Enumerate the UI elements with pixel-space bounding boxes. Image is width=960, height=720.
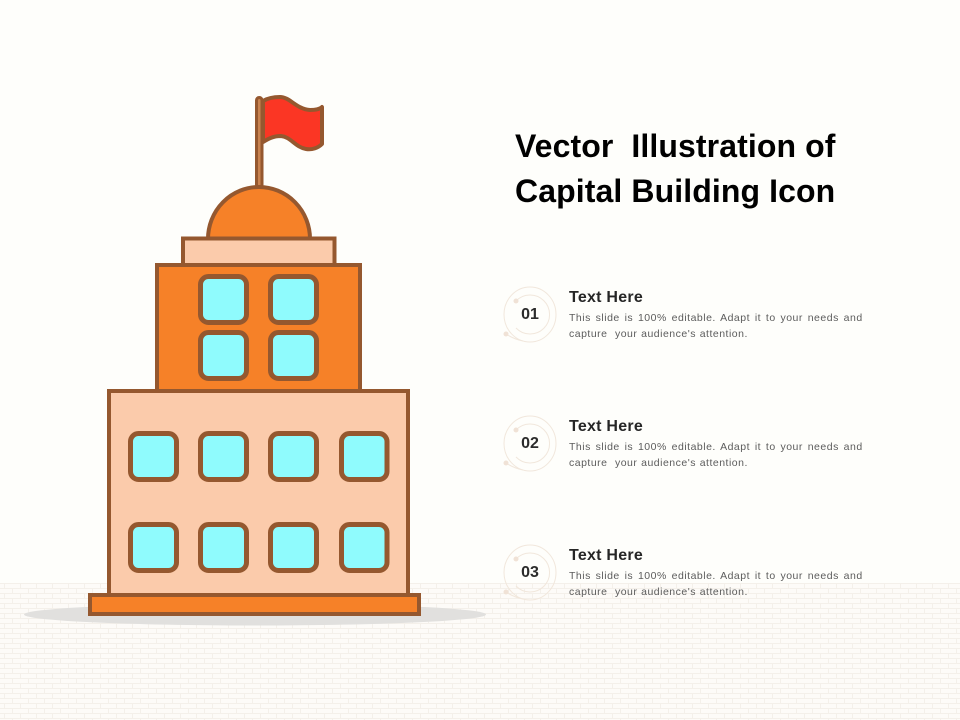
badge 03 xyxy=(504,544,556,600)
ground shadow xyxy=(24,604,486,626)
title xyxy=(515,128,836,209)
badge 02 xyxy=(504,416,556,472)
text 02 xyxy=(569,440,863,468)
heading 02: Text Here xyxy=(569,418,643,435)
list item 03 xyxy=(504,544,863,600)
title: Vector Illustration of xyxy=(515,128,836,164)
text 02: This slide is 100% editable. Adapt it to your needs and xyxy=(569,440,863,452)
upper storey xyxy=(157,265,360,391)
capital building icon xyxy=(90,97,419,614)
badge 01 xyxy=(504,286,556,342)
icon: flag xyxy=(256,97,322,188)
list item 01 xyxy=(504,286,863,342)
text 02: capture your audience's attention. xyxy=(569,456,748,468)
title: Capital Building Icon xyxy=(515,173,835,209)
text 03 xyxy=(569,570,863,598)
heading 01: Text Here xyxy=(569,289,643,306)
badge 01: 01 xyxy=(521,306,539,323)
lower storey xyxy=(109,391,408,595)
base plinth xyxy=(90,595,419,614)
heading 03: Text Here xyxy=(569,547,643,564)
list item 02 xyxy=(504,416,863,472)
text 03: This slide is 100% editable. Adapt it to your needs and xyxy=(569,570,863,582)
text 01 xyxy=(569,312,863,340)
roof band xyxy=(183,238,334,265)
badge 03: 03 xyxy=(521,564,539,581)
text 03: capture your audience's attention. xyxy=(569,586,748,598)
dome xyxy=(208,187,310,239)
text 01: This slide is 100% editable. Adapt it to your needs and xyxy=(569,312,863,324)
text 01: capture your audience's attention. xyxy=(569,328,748,340)
badge 02: 02 xyxy=(521,435,539,452)
